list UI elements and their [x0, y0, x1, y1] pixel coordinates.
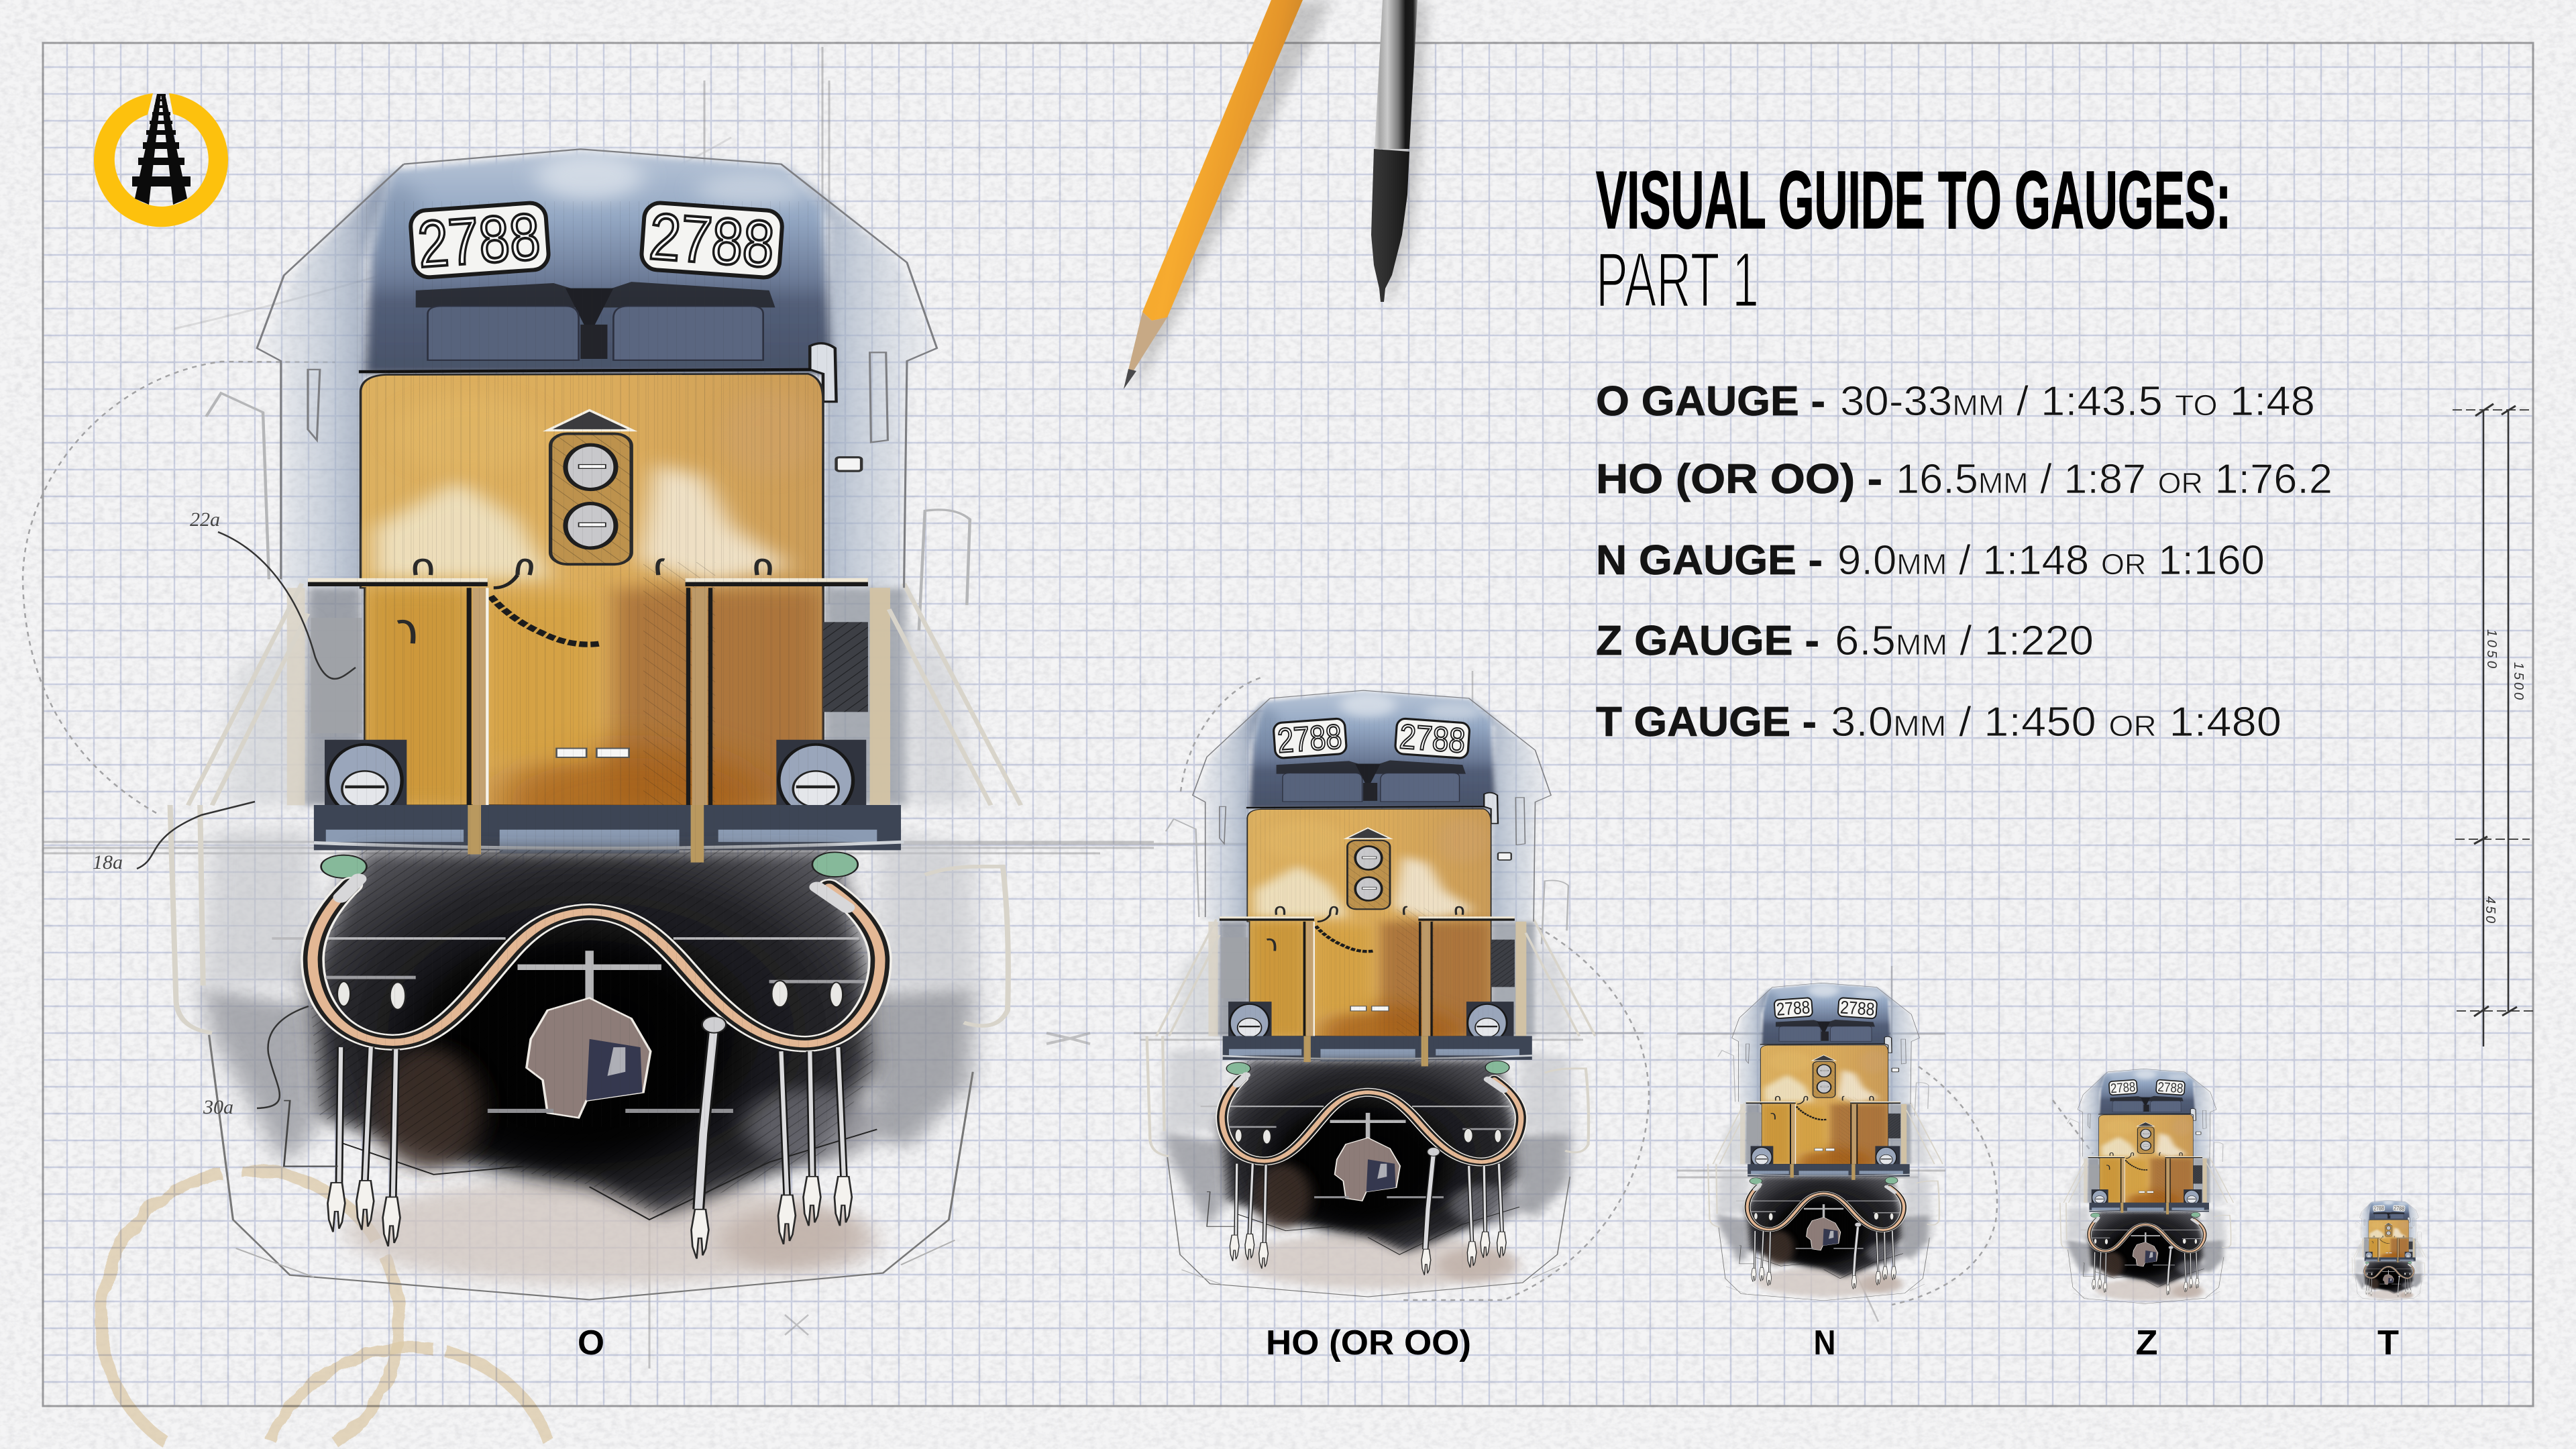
spec: Z gauge	[1596, 618, 2094, 664]
locomotive: Z gauge: 2788	[2110, 1080, 2136, 1096]
spec: HO gauge: 16.5MM / 1:87 OR 1:76.2	[1896, 456, 2332, 502]
dimension value: 1500: 1500	[2511, 662, 2526, 700]
spec: HO gauge	[1596, 456, 2332, 502]
locomotive: HO gauge: 2788	[1398, 716, 1466, 760]
spec: N gauge	[1596, 537, 2265, 584]
locomotive: T gauge: 2788	[2394, 1205, 2405, 1212]
spec: O gauge: O GAUGE -	[1596, 378, 1825, 425]
label: Z: Z	[2136, 1324, 2157, 1362]
spec: T gauge: 3.0MM / 1:450 OR 1:480	[1831, 699, 2282, 745]
label: HO (OR OO): HO (OR OO)	[1266, 1324, 1471, 1362]
pen	[1371, 0, 1429, 309]
spec: O gauge	[1596, 378, 2315, 425]
spec: O gauge: 30-33MM / 1:43.5 TO 1:48	[1840, 378, 2315, 425]
locomotive: O gauge	[170, 149, 1021, 1299]
locomotive: HO gauge: 2788	[1276, 716, 1343, 760]
locomotive: HO gauge	[1147, 690, 1595, 1297]
spec: Z gauge: Z GAUGE -	[1596, 618, 1819, 664]
gauge spec list	[1596, 378, 2332, 745]
pencil	[1124, 0, 1332, 396]
dimension value: 450: 450	[2483, 896, 2498, 923]
label: T: T	[2377, 1324, 2399, 1362]
annotation leaders on O locomotive	[137, 532, 356, 1108]
locomotive: Z gauge: 2788	[2157, 1080, 2184, 1096]
coffee ring stains	[101, 1171, 549, 1442]
spec: N gauge: N GAUGE -	[1596, 537, 1823, 584]
locomotive: T gauge	[2352, 1200, 2426, 1301]
locomotive: N gauge: 2788	[1776, 997, 1811, 1020]
annotation: 18a: 18a	[93, 851, 123, 873]
label: O: O	[578, 1324, 604, 1362]
label: N: N	[1814, 1324, 1835, 1362]
annotation: 22a: 22a	[190, 508, 220, 531]
dimension value: 1050: 1050	[2484, 629, 2499, 668]
spec: Z gauge: 6.5MM / 1:220	[1835, 618, 2094, 664]
title: PART 1	[1596, 236, 1759, 323]
locomotive: O gauge: 2788	[415, 199, 543, 281]
title	[1596, 154, 2231, 323]
locomotive: Z gauge	[2060, 1069, 2233, 1303]
logo: rail track in yellow ring	[94, 93, 228, 227]
locomotive: O gauge: 2788	[647, 199, 777, 281]
dashed construction circles	[23, 362, 2093, 1305]
spec: HO gauge: HO (OR OO) -	[1596, 456, 1882, 502]
locomotive: T gauge: 2788	[2373, 1205, 2385, 1212]
gauge labels under locomotives	[578, 1324, 2399, 1362]
dimension drawing	[2453, 404, 2533, 1046]
spec: T gauge: T GAUGE -	[1596, 699, 1817, 745]
locomotive: N gauge: 2788	[1839, 997, 1875, 1020]
construction pencil lines	[43, 47, 1945, 1368]
spec: T gauge	[1596, 699, 2282, 745]
annotation: 30a: 30a	[203, 1096, 233, 1118]
locomotive: N gauge	[1708, 983, 1943, 1301]
spec: N gauge: 9.0MM / 1:148 OR 1:160	[1837, 537, 2265, 584]
